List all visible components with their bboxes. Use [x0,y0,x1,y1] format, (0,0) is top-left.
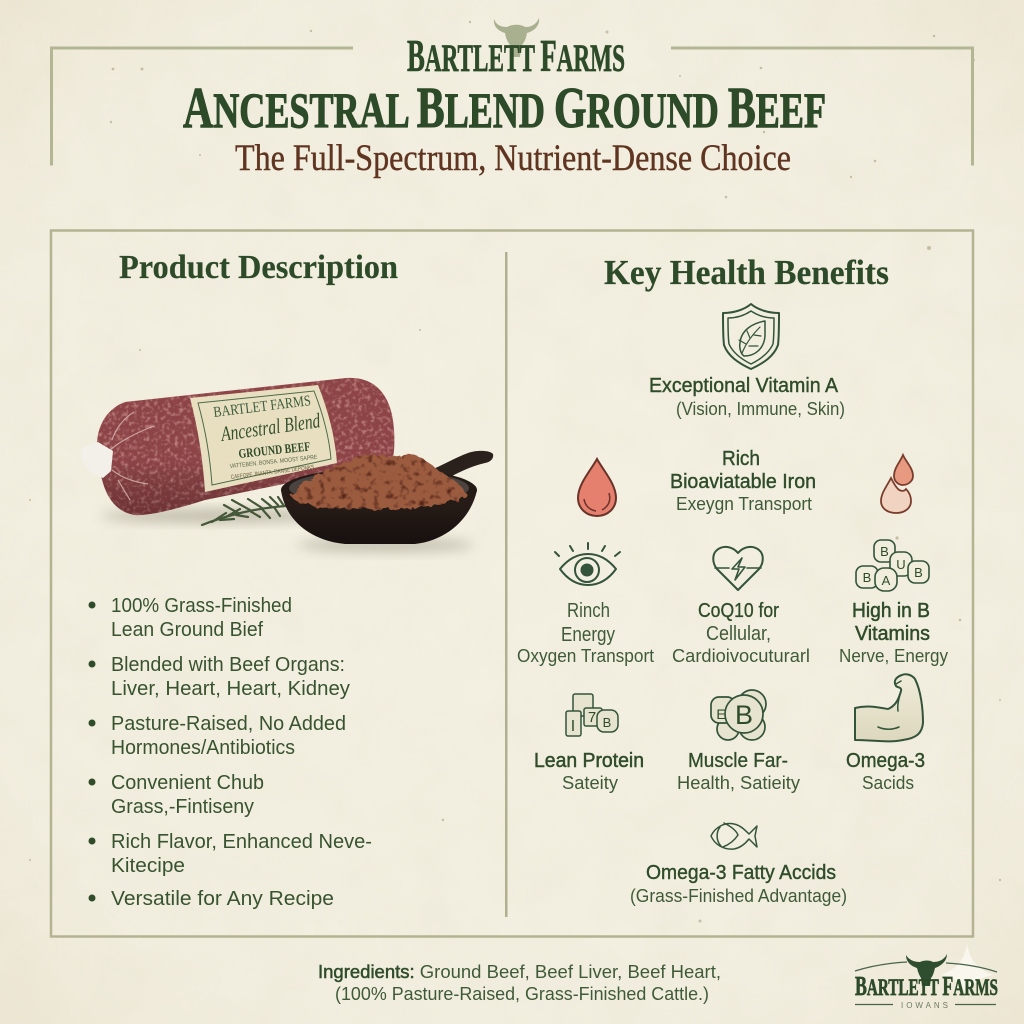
product label: BARTLET FARMS [213,393,312,421]
bullet: rich flavor [111,831,372,877]
icon: B vitamin cluster: A [882,573,891,588]
benefit text: muscle: Muscle Far- [688,750,788,772]
benefit text: muscle [677,750,800,793]
brand name: BARTLETT FARMS [407,31,625,81]
icon: blood drop [578,459,616,516]
product label [190,385,337,492]
title: ANCESTRAL BLEND GROUND BEEF [183,75,826,140]
benefit text: omega-3: Omega-3 [846,750,925,772]
icon: shield with leaf [723,304,779,369]
benefit: lean protein with blocks icon [534,694,644,793]
benefit: iron: Bioaviatable Iron [670,471,816,493]
footer logo [855,944,998,1010]
icon: B circle cluster: B [735,700,753,730]
icon: bull head emblem [494,18,539,57]
product label: VATTEBEN. BONSA. MOOST SAPRE [230,455,318,470]
benefit: CoQ10 with heart icon [672,547,810,666]
bullet: pasture-raised: Pasture-Raised, No Added [111,713,346,735]
bullet: beef organs [111,654,350,700]
bullet: grass-finished [111,595,292,641]
bullet: grass-finished: 100% Grass-Finished [111,595,292,617]
sparkle [941,944,993,1000]
bullet list [88,595,372,910]
benefit: omega-3 with arm icon [846,674,925,793]
rosemary sprig [202,497,286,525]
bullet markers [88,602,96,902]
icon: number blocks [566,694,618,736]
bullet: pasture-raised [111,713,346,759]
icon: B vitamin cluster: B [880,544,889,559]
ingredients note [318,962,721,1004]
benefit: B vitamins with cluster icon [839,540,948,666]
panel divider [505,252,508,917]
bullet: grass-finished: Lean Ground Bief [111,619,263,641]
benefit: omega-3 fatty acids [630,862,847,906]
benefit: muscle with B icon [677,690,800,793]
ingredients note: (100% Pasture-Raised, Grass-Finished Cattle.) [335,984,709,1004]
bullet: convenient chub [111,772,264,818]
benefit text: lean protein: Lean Protein [534,750,644,772]
heading: product description: Product Description [119,249,398,286]
benefit text: energy: Energy [561,624,615,646]
benefit text: lean protein: Sateity [562,773,618,793]
benefit text: muscle: Health, Satieity [677,773,800,793]
benefit text: omega-3 [846,750,925,793]
benefit: iron: Exeygn Transport [676,494,812,514]
cast iron skillet with cooked beef [281,451,493,552]
bullet: convenient chub: Convenient Chub [111,772,264,794]
icon: heart with bolt [713,547,763,590]
bullet: convenient chub: Grass,-Fintiseny [111,796,254,818]
benefit text: CoQ10: Cellular, [706,623,771,645]
benefit: iron [670,448,816,514]
chub of ground beef [81,378,394,515]
icon: B vitamin cluster: B [863,570,871,585]
icon: B vitamin cluster: B [914,565,923,580]
ingredients note: Ingredients: Ground Beef, Beef Liver, Beef Heart, [318,962,721,982]
subtitle: The Full-Spectrum, Nutrient-Dense Choice [235,138,791,179]
bullet: beef organs: Blended with Beef Organs: [111,654,345,676]
panel: key health benefits [517,253,948,906]
benefit: omega-3 fatty acids: Omega-3 Fatty Accids [646,862,836,884]
logo wordmark: BARTLETT FARMS [855,971,998,1001]
icon: number blocks: 7 [588,709,596,726]
benefit text: energy: Rinch [567,600,610,622]
benefit text: energy [517,600,654,666]
heading: key health benefits: Key Health Benefits [604,253,889,292]
icon: B circle cluster [711,690,766,740]
bullet: rich flavor: Rich Flavor, Enhanced Neve- [111,831,372,853]
logo tagline: IOWANS [901,1001,948,1010]
benefit: vitamin A [649,375,845,419]
icon: bull head [906,954,947,986]
benefit text: B vitamins: Vitamins [855,623,930,645]
panel: product description [81,249,493,910]
icon: number blocks: I [571,718,575,735]
chub shadow [100,510,330,522]
header frame [52,48,972,166]
benefit: omega-3 fatty acids: (Grass-Finished Advantage) [630,886,847,906]
benefit: vitamin A: Exceptional Vitamin A [649,375,839,397]
benefit text: CoQ10: Cardioivocuturarl [672,646,810,666]
benefit text: lean protein [534,750,644,793]
icon: eye [555,543,620,585]
icon: B circle cluster: E [716,706,726,722]
bullet: beef organs: Liver, Heart, Heart, Kidney [111,678,350,700]
benefit text: omega-3: Sacids [862,773,914,793]
product label: GROUND BEEF [238,439,311,461]
benefit text: CoQ10 [672,600,810,666]
benefit: energy with eye icon [517,543,654,666]
benefit text: B vitamins [839,600,948,666]
product photo: chub and skillet [81,378,493,552]
benefit: iron: Rich [722,448,760,470]
icon: fish [711,823,757,849]
bullet: pasture-raised: Hormones/Antibiotics [111,737,295,759]
benefit: vitamin A: (Vision, Immune, Skin) [676,399,845,419]
benefit text: B vitamins: High in B [852,600,930,622]
bullet: rich flavor: Kitecipe [111,855,185,877]
benefit text: CoQ10: CoQ10 for [698,600,779,622]
icon: flexed arm [855,674,923,741]
logo arc lines [855,962,997,972]
icon: number blocks: B [603,715,611,730]
bullet: versatile: Versatile for Any Recipe [111,888,334,910]
product label: Ancestral Blend [218,408,322,446]
icon: B vitamin cluster [856,540,929,591]
benefit text: energy: Oxygen Transport [517,646,654,666]
benefit text: B vitamins: Nerve, Energy [839,646,948,666]
main panel frame [51,230,973,936]
product label: CAFFOPE JNANTA. DANSE DEPONKS [231,465,315,481]
icon: two drops [881,455,913,513]
icon: B vitamin cluster: U [896,557,906,572]
